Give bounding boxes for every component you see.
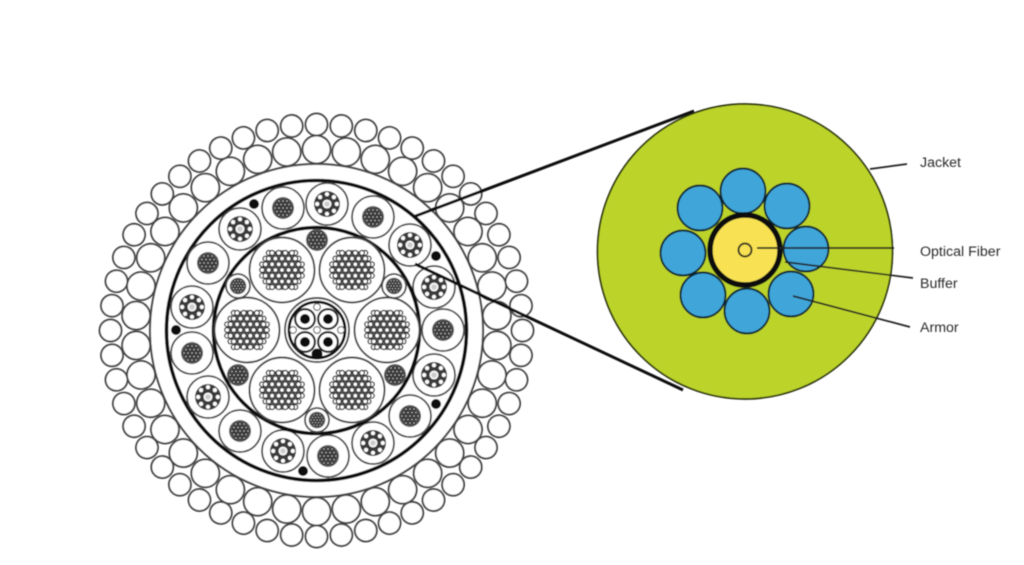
label: jacket: Jacket — [920, 155, 961, 171]
middle strand layer — [171, 183, 464, 477]
outer strand layer boundary — [166, 180, 466, 480]
label: optical fiber: Optical Fiber — [920, 244, 1001, 260]
small filler strands — [226, 229, 406, 432]
white sheath — [150, 164, 483, 497]
outer armor wires — [100, 114, 534, 548]
detail fiber diagram — [598, 104, 892, 399]
leader lines — [757, 164, 913, 327]
label: buffer: Buffer — [920, 276, 958, 292]
buffer — [710, 215, 780, 285]
jacket — [598, 104, 892, 399]
six large conductors — [214, 238, 420, 422]
cable cross-section — [100, 114, 534, 548]
zoom callout lines — [413, 111, 694, 390]
black filler dots — [171, 199, 441, 476]
inner armor wires — [121, 136, 512, 526]
central optical core — [285, 298, 349, 362]
inner layer boundary — [214, 228, 420, 434]
armor wires — [660, 168, 828, 334]
optical fiber — [738, 244, 752, 256]
label: armor: Armor — [920, 320, 959, 336]
